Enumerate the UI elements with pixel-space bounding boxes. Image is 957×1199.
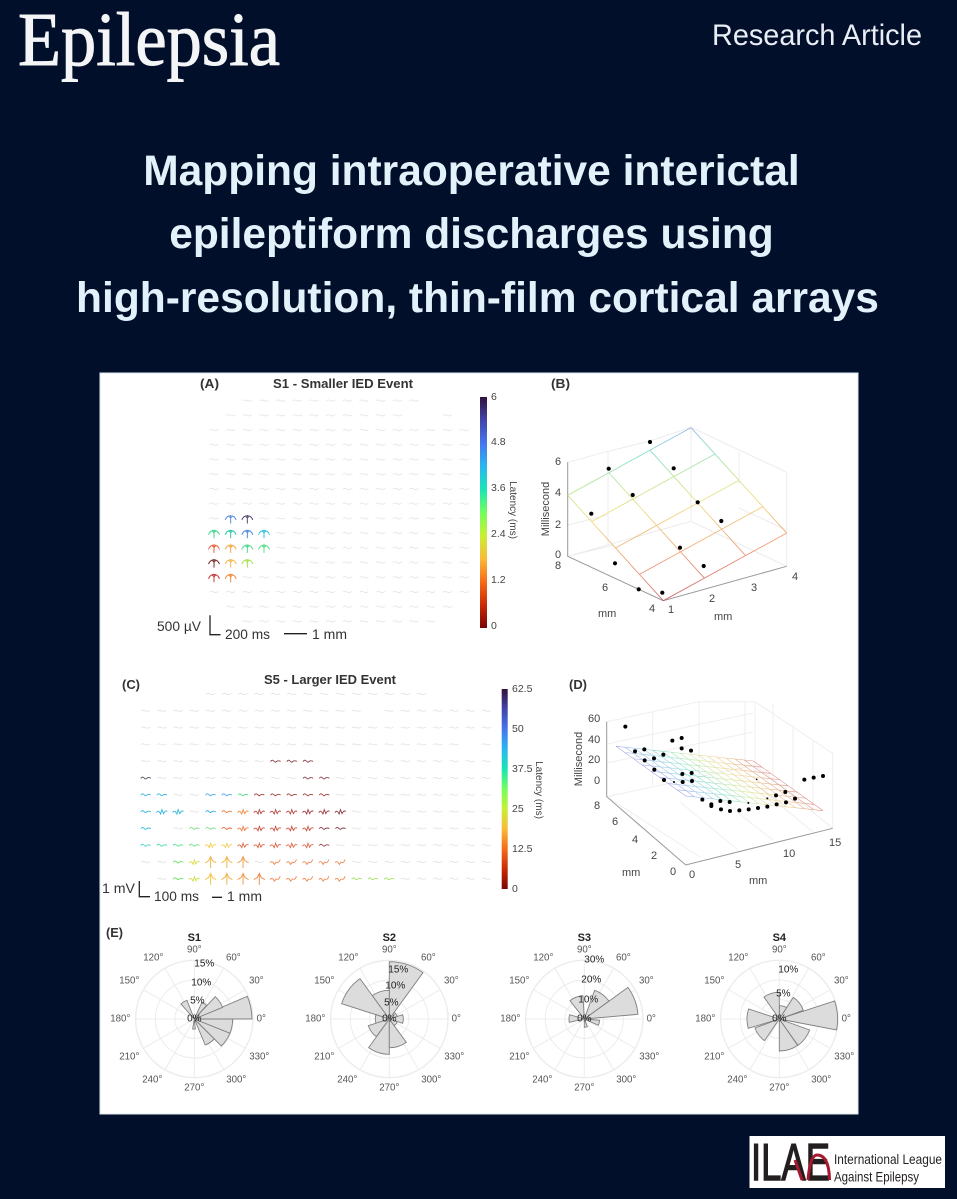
S2 title and labels: 0° [452,1014,461,1024]
logo: ILAE International League Against Epilepsy: Against Epilepsy [834,1168,919,1184]
panel D axis labels: mm [622,867,640,879]
panel D axis labels: 20 [588,754,600,766]
panel B axis labels: 4 [555,487,561,499]
S3 title and labels: 20% [581,974,601,986]
panel C heading [122,672,397,692]
panel D axis labels: mm [749,875,767,887]
panel B axis labels: mm [714,611,732,623]
S2 title and labels [305,932,464,1094]
panel A heading: S1 - Smaller IED Event [273,376,414,391]
S3 title and labels: 210° [509,1052,529,1062]
panel B axis labels: mm [598,608,616,620]
S2 wedges [342,962,423,1054]
S4 title and labels: 30° [834,976,849,986]
S3 title and labels: S3 [578,932,591,944]
panel B label: (B) [551,376,570,391]
S4 title and labels: 0° [842,1014,851,1024]
S2 title and labels: 60° [421,952,436,964]
title: epileptiform discharges using [169,211,774,258]
logo: ILAE International League Against Epilepsy [750,1134,945,1192]
panel C colour bar: 50 [512,723,524,735]
panel C scale bars [102,880,262,904]
panel D axis labels: 0 [670,866,676,878]
S4 title and labels: 210° [704,1052,724,1062]
S2 title and labels: 330° [444,1052,464,1062]
S1 title and labels: 15% [194,958,214,970]
panel B axis labels: 3 [751,582,757,594]
S4 title and labels: 120° [728,952,748,964]
label: Research Article: Research Article [712,19,922,52]
panel B surface mesh [568,428,787,601]
S3 title and labels: 30% [584,954,604,966]
panel D axis labels: 0 [594,775,600,787]
panel B axes box [568,427,787,601]
panel C grey electrode traces [138,686,495,887]
S2 title and labels: 10% [385,980,405,992]
S4 wedges [747,992,838,1051]
panel A grey electrode traces [206,393,472,629]
S2 title and labels: 180° [305,1014,325,1024]
panel A colour bar: Latency (ms) [507,481,518,539]
panel D surface mesh [616,746,823,811]
panel A scale bars: 500 µV [157,618,202,634]
S3 title and labels: 330° [639,1052,659,1062]
S3 title and labels: 270° [574,1082,594,1094]
panel B axis labels: 2 [709,593,715,605]
polar plot S2 [305,932,464,1094]
panel A coloured traces [208,515,270,582]
panel C scale bars: 1 mm [227,888,262,904]
panel D axis labels: 0 [689,869,695,881]
S1 title and labels: 240° [142,1074,162,1086]
panel A colour bar: 0 [491,620,497,632]
S1 title and labels: 0% [187,1014,202,1024]
S4 title and labels: 5% [776,988,791,1000]
S2 title and labels: 15% [388,964,408,976]
panel A colour bar [480,391,518,632]
panel D axis labels: 15 [829,837,841,849]
polar plot S3 [500,932,659,1094]
S2 title and labels: 120° [338,952,358,964]
panel D axis labels: 40 [588,734,600,746]
S4 title and labels: 0% [772,1014,787,1024]
S3 title and labels: 180° [500,1014,520,1024]
panel D axis labels: 6 [612,816,618,828]
panel B: S1 3D latency surface [540,376,798,623]
panel D data points [623,725,825,813]
panel C colour bar: Latency (ms) [533,761,544,819]
panel B axis labels: 6 [602,582,608,594]
S2 title and labels: 0% [382,1014,397,1024]
panel A colour bar: 3.6 [491,482,506,494]
panel C heading: (C) [122,677,140,692]
title [76,148,879,322]
panel A colour bar: 6 [491,391,497,403]
title: high-resolution, thin-film cortical arrays [76,275,879,322]
S2 title and labels: 210° [314,1052,334,1062]
panel D axis labels [573,713,841,887]
S1 wedges [181,996,252,1046]
S1 title and labels: 30° [249,976,264,986]
panel B axis labels: 2 [555,519,561,531]
panel B axis labels: Millisecond [540,482,552,536]
S3 title and labels: 0% [577,1014,592,1024]
panel A colour bar: 1.2 [491,574,506,586]
S3 title and labels: 90° [577,944,592,956]
panel A scale bars: 200 ms [225,626,270,642]
S1 title and labels [110,932,269,1094]
S3 wedges [569,987,638,1027]
S3 title and labels: 240° [532,1074,552,1086]
panel B axis labels: 1 [668,604,674,616]
S4 title and labels: 240° [727,1074,747,1086]
S4 title and labels: 330° [834,1052,854,1062]
panel B axis labels: 0 [555,549,561,561]
S1 title and labels: 300° [226,1074,246,1086]
logo: Epilepsia: Epilepsia [18,0,280,82]
panel B axis labels: 8 [555,560,561,572]
panel B data points [589,440,723,595]
panel D axis labels: 2 [651,850,657,862]
panel D axis labels: 60 [588,713,600,725]
panel C colour bar: 62.5 [512,683,533,695]
panel C colour bar: 37.5 [512,763,533,775]
panel C colour bar [502,683,544,895]
S1 title and labels: 120° [143,952,163,964]
panel E: polar histograms [106,925,854,1094]
S3 title and labels: 30° [639,976,654,986]
S1 title and labels: S1 [188,932,201,944]
S1 title and labels: 180° [110,1014,130,1024]
panel A heading: (A) [200,376,219,391]
panel C heading: S5 - Larger IED Event [264,672,397,687]
panel D label: (D) [569,677,587,692]
S2 title and labels: 5% [384,998,399,1008]
S2 title and labels: 240° [337,1074,357,1086]
panel A scale bars: 1 mm [312,626,347,642]
panel D axis labels: 4 [632,834,638,846]
S1 title and labels: 270° [184,1082,204,1094]
S1 title and labels: 0° [257,1014,266,1024]
S2 title and labels: S2 [383,932,396,944]
S1 title and labels: 210° [119,1052,139,1062]
S1 title and labels: 150° [119,976,139,986]
S3 title and labels: 60° [616,952,631,964]
logo: ILAE International League Against Epilepsy: ILAE [751,1134,830,1192]
S3 title and labels [500,932,659,1094]
panel B axis labels: 6 [555,456,561,468]
panel D: S5 3D latency surface [569,677,841,887]
panel B axis labels: 4 [649,603,655,615]
S3 title and labels: 300° [616,1074,636,1086]
panel D axis labels: Millisecond [573,732,585,786]
S4 title and labels: 270° [769,1082,789,1094]
panel A heading [200,376,414,391]
S4 title and labels: 90° [772,944,787,956]
title: Mapping intraoperative interictal [143,148,800,195]
polar plot S1 [110,932,269,1094]
S2 title and labels: 270° [379,1082,399,1094]
S4 title and labels: 180° [695,1014,715,1024]
figure panel [100,373,858,1114]
S4 title and labels: 60° [811,952,826,964]
panel A: S1 smaller IED event waveforms [157,376,518,642]
S3 title and labels: 10% [578,994,598,1006]
panel D axis labels: 5 [735,859,741,871]
S3 title and labels: 0° [647,1014,656,1024]
panel A colour bar: 2.4 [491,528,506,540]
S1 title and labels: 90° [187,944,202,956]
S2 title and labels: 90° [382,944,397,956]
S4 title and labels: 150° [704,976,724,986]
panel C: S5 larger IED event waveforms [102,672,544,904]
S4 title and labels: 300° [811,1074,831,1086]
panel A scale bars [157,615,347,642]
S4 title and labels: 10% [778,964,798,976]
panel D axis labels: 10 [783,848,795,860]
panel D axes box [607,702,833,865]
panel C colour bar: 0 [512,883,518,895]
polar plot S4 [695,932,854,1094]
panel B axis labels [540,456,798,623]
panel C scale bars: 100 ms [154,888,199,904]
panel C colour bar: 12.5 [512,843,533,855]
S2 title and labels: 30° [444,976,459,986]
S1 title and labels: 60° [226,952,241,964]
S4 title and labels [695,932,854,1094]
S3 title and labels: 150° [509,976,529,986]
S4 title and labels: S4 [773,932,787,944]
panel B axis labels: 4 [792,571,798,583]
panel D axis labels: 8 [594,800,600,812]
panel C coloured traces [141,760,394,885]
panel E label: (E) [106,925,123,940]
S1 title and labels: 5% [190,996,205,1006]
S2 title and labels: 150° [314,976,334,986]
panel A colour bar: 4.8 [491,436,506,448]
S1 title and labels: 10% [191,978,211,988]
panel C scale bars: 1 mV [102,880,136,896]
S2 title and labels: 300° [421,1074,441,1086]
S3 title and labels: 120° [533,952,553,964]
panel C colour bar: 25 [512,803,524,815]
S1 title and labels: 330° [249,1052,269,1062]
